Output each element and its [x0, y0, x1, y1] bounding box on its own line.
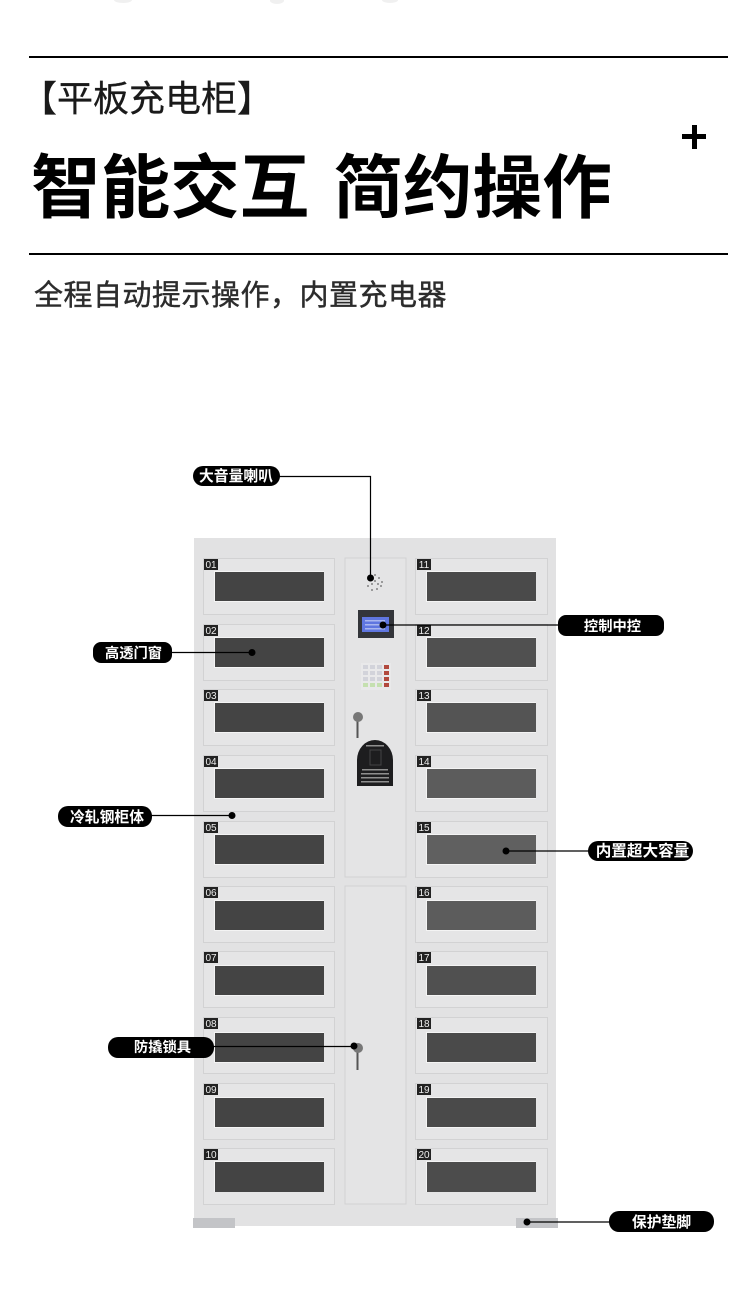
right compartments: 18: [418, 1019, 430, 1030]
rule under title: [29, 253, 728, 255]
cabinet body: [193, 538, 558, 1228]
left compartments: 05: [205, 823, 217, 834]
callout: speaker: 大音量喇叭: [199, 467, 273, 485]
right compartments: 20: [418, 1150, 430, 1161]
right compartments: 12: [418, 626, 430, 637]
foot left: [193, 1218, 235, 1228]
faint cut-off text from the previous section: [114, 0, 398, 4]
callout: speaker: [193, 466, 374, 582]
callout: window: 高透门窗: [105, 644, 162, 662]
left compartments: 01: [205, 560, 217, 571]
right compartments: 13: [418, 691, 430, 702]
left compartments: 02: [205, 626, 217, 637]
left compartments: 10: [205, 1150, 217, 1161]
callout: feet: [524, 1211, 714, 1232]
icon: instruction plate: [357, 740, 393, 786]
callout: steel body: [58, 806, 236, 827]
callout: feet: 保护垫脚: [632, 1213, 691, 1231]
main title: 智能交互 简约操作: [31, 149, 612, 227]
callout: steel body: 冷轧钢柜体: [70, 808, 144, 826]
right compartments: 17: [418, 953, 430, 964]
top rule: [29, 56, 728, 58]
right compartments: 11: [419, 560, 430, 571]
right compartments: 19: [418, 1085, 430, 1096]
callout: control panel: 控制中控: [584, 617, 641, 635]
subtitle tag: tablet charging cabinet: 【平板充电柜】: [21, 78, 273, 119]
icon: lower key lock: [353, 1043, 363, 1070]
callout: control panel: [380, 615, 664, 636]
plus icon: [682, 125, 706, 149]
icon: control screen: [358, 610, 394, 638]
callout: lock: 防撬锁具: [134, 1038, 191, 1056]
left compartments: 09: [205, 1085, 217, 1096]
left compartments: 08: [205, 1019, 217, 1030]
icon: speaker holes: [367, 574, 383, 591]
right compartments: [416, 558, 548, 1204]
left compartments: 06: [205, 888, 217, 899]
callout: capacity: [502, 841, 693, 861]
right compartments: 15: [418, 823, 430, 834]
left compartments: 03: [205, 691, 217, 702]
central lower door: [345, 886, 406, 1204]
callout: window: [93, 642, 256, 663]
central upper door: [345, 558, 406, 877]
callout: lock: [108, 1037, 358, 1058]
icon: keypad: [361, 663, 391, 690]
icon: upper key lock: [353, 712, 363, 738]
right compartments: 16: [418, 888, 430, 899]
left compartments: 04: [205, 757, 217, 768]
left compartments: 07: [205, 953, 217, 964]
right compartments: 14: [418, 757, 430, 768]
left compartments: [204, 558, 334, 1204]
callout: capacity: 内置超大容量: [596, 841, 689, 860]
foot right: [516, 1218, 558, 1228]
description: 全程自动提示操作，内置充电器: [34, 280, 447, 312]
